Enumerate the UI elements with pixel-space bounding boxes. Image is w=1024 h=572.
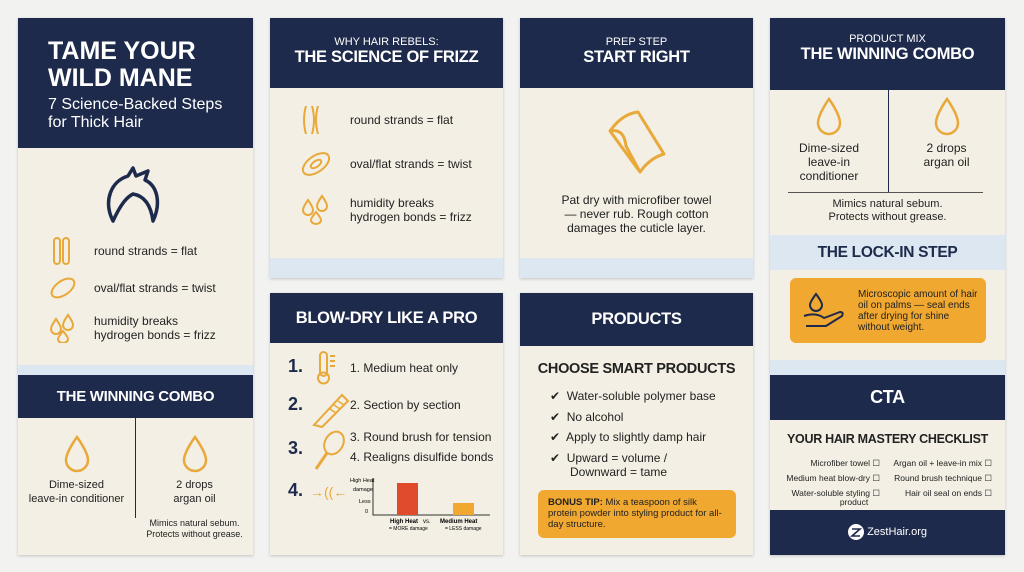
panel: blow-dry: 3. bbox=[288, 438, 303, 458]
panel: title column bbox=[18, 18, 253, 555]
panel: blow-dry: 2. bbox=[288, 394, 303, 414]
panel: product mix column: argan oil bbox=[923, 155, 970, 169]
bar chart: heat damage: Medium Heat bbox=[440, 519, 477, 525]
bar chart: heat damage: damage bbox=[353, 487, 373, 493]
panel: blow-dry: 4. bbox=[288, 480, 303, 500]
list: strand facts: hydrogen bonds = frizz bbox=[94, 328, 216, 342]
text: towel tip: — never rub. Rough cotton bbox=[564, 207, 709, 221]
callout: oil tip: Microscopic amount of hair oil on palms — seal ends after drying for shine without weight. bbox=[858, 289, 978, 333]
bar chart: heat damage: vs. bbox=[423, 519, 431, 525]
bar chart: heat damage: Less bbox=[359, 499, 371, 505]
panel: products: CHOOSE SMART PRODUCTS bbox=[538, 361, 735, 377]
panel: product mix column: PRODUCT MIX bbox=[849, 33, 926, 45]
panel: prep step bbox=[520, 18, 753, 278]
icon: comb bbox=[312, 394, 350, 428]
checklist: products: Downward = tame bbox=[570, 464, 667, 478]
bar chart: heat damage: = MORE damage bbox=[389, 526, 428, 532]
callout: bonus tip: BONUS TIP: Mix a teaspoon of silk protein powder into styling product for all-day structure. bbox=[548, 497, 722, 530]
callout: oil tip bbox=[790, 278, 986, 343]
text: towel tip: damages the cuticle layer. bbox=[567, 221, 706, 235]
checklist: Microfiber towel ☐ bbox=[810, 458, 880, 468]
panel: science of frizz: THE SCIENCE OF FRIZZ bbox=[295, 48, 478, 66]
icon: hair bbox=[106, 166, 160, 223]
bar chart: heat damage: 0 bbox=[365, 509, 368, 515]
panel: product mix column: THE WINNING COMBO bbox=[801, 45, 974, 63]
combo content: Protects without grease. bbox=[146, 529, 243, 539]
list: frizz facts: humidity breaks bbox=[350, 196, 434, 210]
combo content: leave-in conditioner bbox=[29, 493, 124, 505]
footer: brand bbox=[770, 510, 1005, 555]
heading: CTA bbox=[770, 375, 1005, 420]
list: strand facts bbox=[50, 237, 216, 343]
panel: blow-dry: 1. bbox=[288, 356, 303, 376]
checklist: products: ✔ No alcohol bbox=[550, 410, 623, 424]
checklist: YOUR HAIR MASTERY CHECKLIST bbox=[787, 432, 988, 446]
panel: product mix column: 2 drops bbox=[926, 141, 967, 155]
text: towel tip bbox=[561, 193, 712, 235]
steps bbox=[288, 356, 493, 500]
heading: lock-in step bbox=[770, 235, 1005, 270]
panel: blow-dry: BLOW-DRY LIKE A PRO bbox=[296, 309, 477, 327]
list: frizz facts bbox=[302, 106, 472, 225]
panel: prep step: START RIGHT bbox=[583, 48, 690, 66]
combo content: 2 drops bbox=[176, 479, 213, 491]
checklist: products: ✔ Apply to slightly damp hair bbox=[550, 430, 706, 444]
heading: winning combo bbox=[18, 375, 253, 418]
bar chart: heat damage: High Heat bbox=[390, 519, 418, 525]
panel: product mix column: Dime-sized bbox=[799, 141, 859, 155]
list: frizz facts: hydrogen bonds = frizz bbox=[350, 210, 472, 224]
combo content: Dime-sized bbox=[49, 479, 104, 491]
panel: products: PRODUCTS bbox=[591, 310, 682, 328]
panel: product mix column bbox=[770, 18, 1005, 555]
list: frizz facts: round strands = flat bbox=[350, 113, 453, 127]
checklist: Hair oil seal on ends ☐ bbox=[905, 488, 992, 498]
panel: products bbox=[520, 293, 753, 555]
panel: product mix column: Mimics natural sebum. bbox=[832, 198, 943, 210]
icon: thermometer bbox=[317, 351, 335, 384]
icon: round brush bbox=[314, 430, 345, 470]
panel: blow-dry: →((← bbox=[310, 484, 347, 500]
panel: product mix column: Protects without grease. bbox=[828, 211, 946, 223]
title block: TAME YOUR bbox=[48, 37, 196, 65]
bar chart: heat damage bbox=[350, 478, 490, 532]
icon: towel bbox=[608, 110, 666, 174]
bar chart: heat damage: High Heat bbox=[350, 478, 375, 484]
title block: for Thick Hair bbox=[48, 114, 143, 131]
list: strand facts: round strands = flat bbox=[94, 244, 197, 258]
heading: CTA: CTA bbox=[870, 387, 905, 407]
text: towel tip: Pat dry with microfiber towel bbox=[561, 193, 712, 207]
checklist: Round brush technique ☐ bbox=[894, 473, 992, 483]
callout: bonus tip bbox=[538, 490, 736, 538]
title block: WILD MANE bbox=[48, 64, 192, 92]
panel: blow-dry: 3. Round brush for tension bbox=[350, 430, 491, 444]
combo content: Mimics natural sebum. bbox=[149, 518, 240, 528]
panel: product mix column: conditioner bbox=[800, 169, 858, 183]
checklist bbox=[786, 432, 992, 507]
list: strand facts: humidity breaks bbox=[94, 314, 178, 328]
panel: blow-dry: 2. Section by section bbox=[350, 398, 461, 412]
checklist: products: ✔ Upward = volume / bbox=[550, 450, 667, 464]
panel: prep step: PREP STEP bbox=[606, 36, 667, 48]
combo content bbox=[29, 418, 243, 539]
title block: 7 Science-Backed Steps bbox=[48, 96, 222, 113]
checklist: Argan oil + leave-in mix ☐ bbox=[893, 458, 992, 468]
checklist: product bbox=[840, 497, 868, 507]
panel: science of frizz: WHY HAIR REBELS: bbox=[334, 36, 439, 48]
list: strand facts: oval/flat strands = twist bbox=[94, 281, 216, 295]
heading: winning combo: THE WINNING COMBO bbox=[57, 388, 214, 405]
checklist: Water-soluble styling ☐ bbox=[791, 488, 880, 498]
footer: brand: ZestHair.org bbox=[867, 526, 927, 538]
checklist: products: ✔ Water-soluble polymer base bbox=[550, 389, 716, 403]
panel: blow-dry bbox=[270, 293, 503, 555]
checklist: Medium heat blow-dry ☐ bbox=[786, 473, 880, 483]
title block bbox=[18, 18, 253, 148]
checklist: products bbox=[550, 389, 716, 478]
panel: blow-dry: 1. Medium heat only bbox=[350, 361, 458, 375]
combo content: argan oil bbox=[173, 493, 216, 505]
list: frizz facts: oval/flat strands = twist bbox=[350, 157, 472, 171]
panel: science of frizz bbox=[270, 18, 503, 278]
panel: blow-dry: 4. Realigns disulfide bonds bbox=[350, 450, 493, 464]
panel: product mix column: leave-in bbox=[808, 155, 850, 169]
heading: lock-in step: THE LOCK-IN STEP bbox=[818, 244, 957, 261]
bar chart: heat damage: = LESS damage bbox=[445, 526, 482, 532]
